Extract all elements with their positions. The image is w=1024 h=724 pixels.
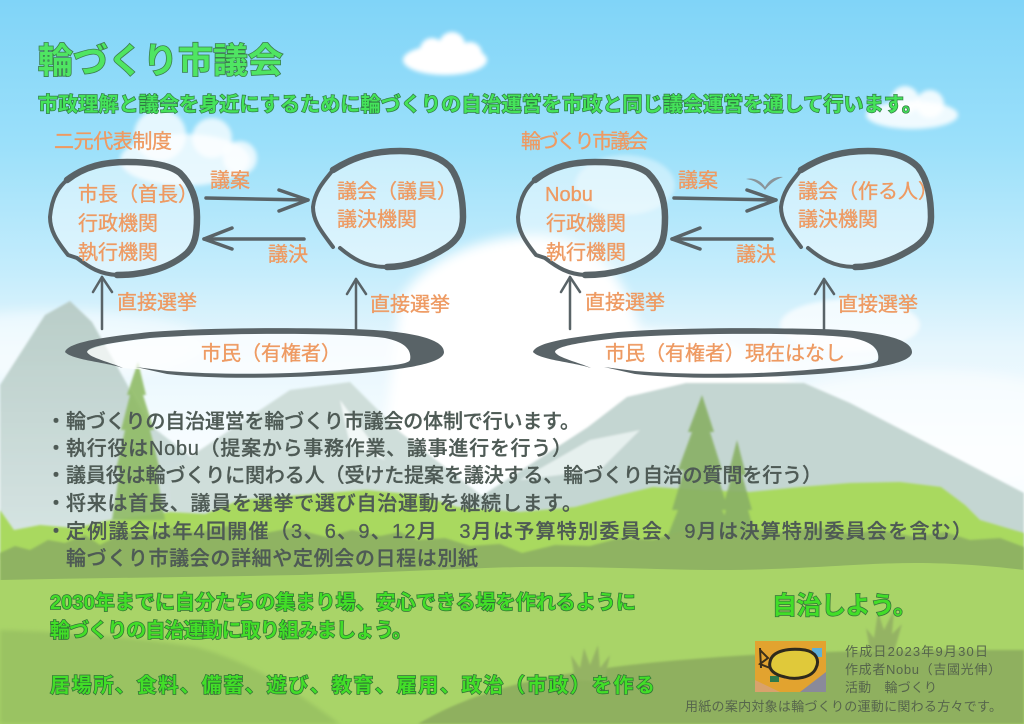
clouds bbox=[120, 32, 958, 351]
bullet list bbox=[46, 410, 972, 570]
diagram: 輪づくり市議会 bbox=[518, 130, 938, 378]
field bbox=[0, 563, 1024, 724]
arrow: proposal bbox=[206, 190, 308, 211]
credits bbox=[685, 644, 1002, 714]
bullet list: ・ bbox=[46, 521, 66, 543]
call to action: 輪づくりの自治運動に取り組みましょう。 bbox=[50, 619, 412, 642]
circle: Nobu bbox=[518, 162, 665, 275]
bullet list: ・ bbox=[46, 465, 66, 487]
diagram heading: 二元代表制度 bbox=[54, 130, 172, 153]
circle: council: 議決機関 bbox=[337, 208, 417, 231]
label: proposal: 議案 bbox=[210, 169, 250, 192]
label: proposal: 議案 bbox=[678, 169, 718, 192]
circle: mayor: 市長（首長） bbox=[78, 183, 198, 206]
mountains bbox=[0, 301, 1024, 560]
treeline dark bbox=[0, 526, 1024, 600]
label: election right: 直接選挙 bbox=[370, 293, 450, 316]
circle: mayor: 行政機関 bbox=[78, 212, 158, 235]
arrow: election left bbox=[93, 277, 112, 329]
bullet list: ・ bbox=[46, 493, 66, 515]
list of things to make: 居場所、食料、備蓄、遊び、教育、雇用、政治（市政）を作る bbox=[50, 673, 655, 697]
circle: council bbox=[313, 151, 463, 267]
label: election right: 直接選挙 bbox=[838, 293, 918, 316]
circle: mayor bbox=[50, 162, 198, 275]
ellipse: citizens: 市民（有権者） bbox=[201, 342, 341, 365]
bullet list: ・ bbox=[46, 411, 66, 433]
bullet list: 議員役は輪づくりに関わる人（受けた提案を議決する、輪づくり自治の質問を行う） bbox=[66, 464, 822, 487]
credits: 活動 輪づくり bbox=[845, 680, 937, 695]
arrow: resolution bbox=[204, 228, 304, 249]
circle: makers council bbox=[781, 151, 938, 267]
ellipse: citizens bbox=[65, 328, 444, 378]
label: resolution: 議決 bbox=[736, 243, 776, 266]
label: election left: 直接選挙 bbox=[585, 291, 665, 314]
diagram heading: 輪づくり市議会 bbox=[521, 130, 648, 153]
arrow: election right bbox=[815, 279, 834, 330]
label: resolution: 議決 bbox=[268, 243, 308, 266]
bullet list: 定例議会は年4回開催（3、6、9、12月 3月は予算特別委員会、9月は決算特別委員会を含む） bbox=[66, 520, 972, 543]
credits: 作成者Nobu（吉國光伸） bbox=[845, 662, 1001, 677]
arrow: election left bbox=[561, 277, 580, 329]
subtitle: 市政理解と議会を身近にするために輪づくりの自治運営を市政と同じ議会運営を通して行います。 bbox=[38, 93, 922, 116]
circle: makers council: 議決機関 bbox=[798, 208, 878, 231]
title: 輪づくり市議会 bbox=[38, 42, 283, 81]
label: election left: 直接選挙 bbox=[117, 291, 197, 314]
bullet list: 輪づくりの自治運営を輪づくり市議会の体制で行います。 bbox=[66, 410, 580, 433]
circle: Nobu: Nobu bbox=[545, 184, 593, 206]
conifers bbox=[112, 362, 758, 545]
ellipse: citizens none yet: 市民（有権者）現在はなし bbox=[605, 342, 845, 365]
bullet list: 将来は首長、議員を選挙で選び自治運動を継続します。 bbox=[66, 492, 582, 515]
icon: logo bbox=[755, 641, 826, 692]
circle: makers council: 議会（作る人） bbox=[798, 180, 938, 203]
lower hills bbox=[0, 630, 340, 724]
circle: Nobu: 執行機関 bbox=[546, 241, 626, 264]
icon: bird bbox=[746, 177, 783, 190]
arrow: election right bbox=[347, 279, 366, 330]
credits: 作成日2023年9月30日 bbox=[845, 644, 988, 659]
call to action bbox=[50, 591, 636, 642]
circle: Nobu: 行政機関 bbox=[546, 212, 626, 235]
bullet list: 執行役はNobu（提案から事務作業、議事進行を行う） bbox=[66, 437, 572, 460]
grass tufts bbox=[571, 610, 902, 682]
diagram: 二元代表制度 bbox=[50, 130, 463, 378]
circle: council: 議会（議員） bbox=[337, 180, 457, 203]
call to action: 2030年までに自分たちの集まり場、安心できる場を作れるように bbox=[50, 591, 636, 614]
ellipse: citizens none yet bbox=[533, 328, 912, 378]
large white cloud bbox=[0, 235, 1024, 490]
circle: mayor: 執行機関 bbox=[78, 241, 158, 264]
bullet list: ・ bbox=[46, 438, 66, 460]
bullet list: 輪づくり市議会の詳細や定例会の日程は別紙 bbox=[66, 547, 478, 570]
credits: 用紙の案内対象は輪づくりの運動に関わる方々です。 bbox=[685, 699, 1002, 714]
arrow: proposal bbox=[674, 190, 776, 211]
slogan: 自治しよう。 bbox=[772, 592, 918, 620]
arrow: resolution bbox=[672, 228, 772, 249]
treeline light bbox=[0, 482, 1024, 600]
